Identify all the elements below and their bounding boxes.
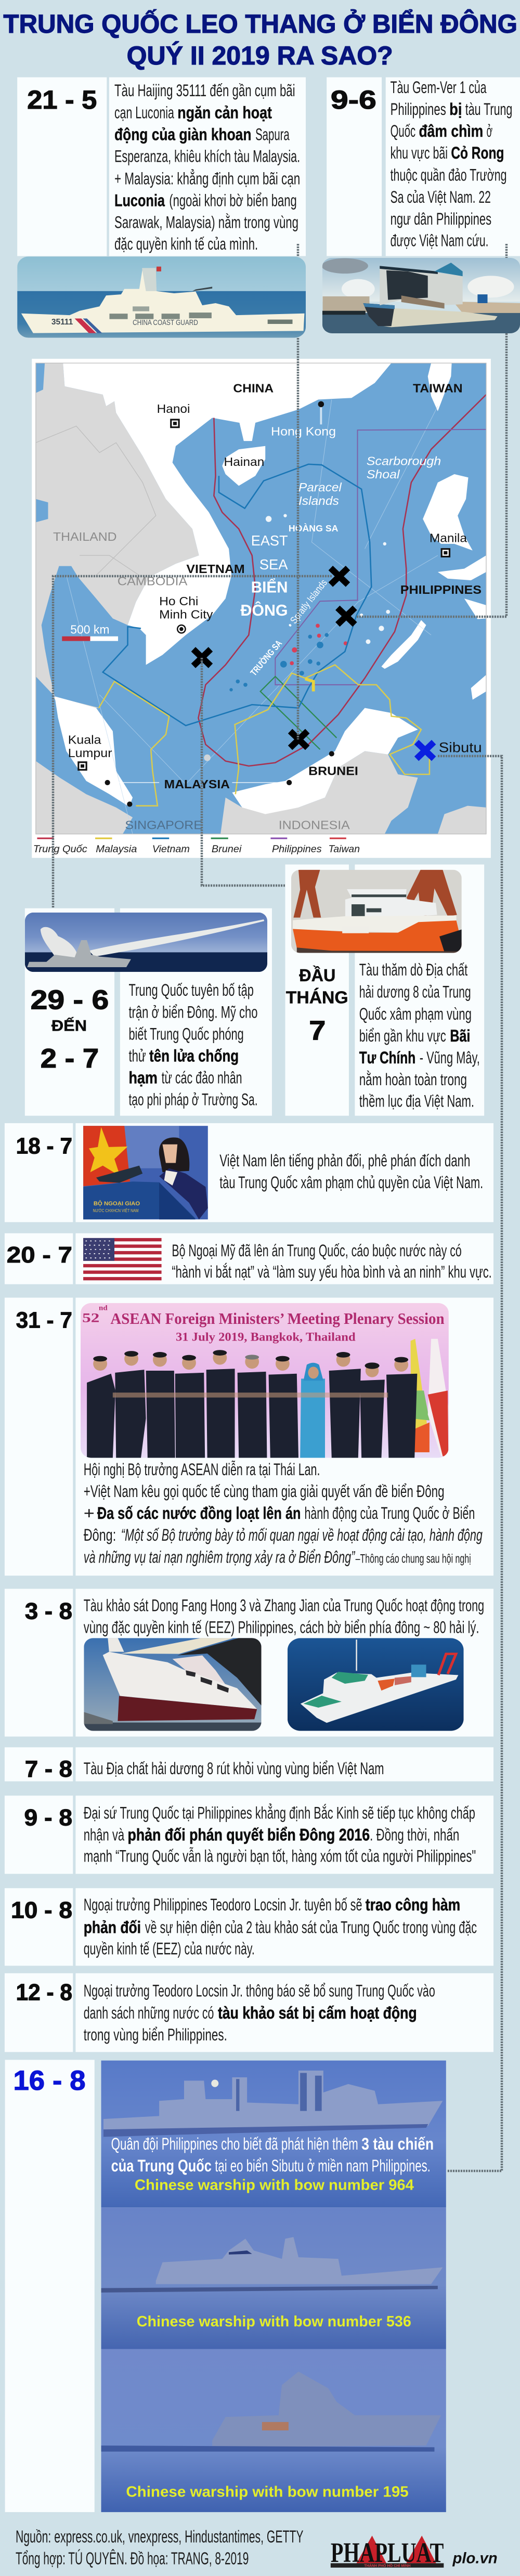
panel: 21-5: Luconia — [114, 191, 165, 210]
panel: 29-6 to 2-7: từ các đảo nhân — [162, 1068, 242, 1087]
panel: 9-6: 9-6 — [331, 85, 376, 114]
logo: Pháp Luật: THÀNH PHỐ HỒ CHÍ MINH — [364, 2562, 411, 2568]
panel: 18-7: 18 - 7 — [16, 1133, 72, 1159]
map labels: INDONESIA — [279, 818, 350, 831]
map labels: VIETNAM — [186, 562, 245, 576]
photo: China Coast Guard ship — [17, 256, 306, 337]
connectors: dotted leader lines from events to map — [53, 244, 506, 2171]
panel: early July: Bãi — [450, 1026, 470, 1045]
panel: 9-8: 9 - 8 — [24, 1805, 72, 1830]
panel: 12-8: danh sách những nước có — [84, 2004, 214, 2023]
panel: 9-6 — [327, 77, 520, 256]
footer credits — [16, 2527, 304, 2568]
photo: warship 964: Chinese warship with bow number 964 — [135, 2177, 414, 2194]
map labels: Hong Kong — [271, 424, 336, 438]
map labels: Manila — [430, 531, 467, 545]
panel: 29-6 to 2-7: tạo phi pháp ở Trường Sa. — [128, 1090, 258, 1109]
panel: 31-7: + — [84, 1504, 95, 1523]
panel: 7-8: 7 - 8 — [25, 1756, 72, 1782]
panel: early July: Tư Chính — [359, 1048, 415, 1067]
panel: 29-6 to 2-7: biết Trung Quốc phóng — [128, 1024, 244, 1043]
claim line: Philippines — [275, 430, 486, 685]
photo: warship 964 — [101, 2061, 446, 2207]
logo: Pháp Luật: PHAPLUAT — [331, 2537, 444, 2568]
panel: 21-5: cạn Luconia — [114, 103, 174, 122]
panel: 29-6 to 2-7 — [25, 908, 272, 1116]
panel: early July — [285, 865, 484, 1116]
city markers — [77, 401, 450, 807]
photo: China Coast Guard ship: CHINA COAST GUARD — [133, 318, 198, 327]
map labels: SINGAPORE — [125, 818, 202, 831]
land: Hainan — [222, 446, 265, 486]
photo: Haiyang Dizhi 8 survey ship — [291, 870, 462, 953]
photo: foreign ministry spokesperson — [83, 1126, 208, 1219]
panel: 9-6: khu vực bãi — [391, 144, 448, 162]
map labels: MALAYSIA — [164, 777, 230, 791]
panel: 21-5: động của giàn khoan — [114, 125, 251, 144]
panel: 3-8 — [5, 1589, 493, 1737]
panel: 21-5: Sapura — [255, 125, 290, 144]
map legend — [33, 838, 360, 855]
map labels: Shoal — [367, 467, 400, 481]
photo: China Coast Guard ship: 35111 — [51, 317, 73, 327]
panel: 21-5 — [17, 77, 306, 256]
panel: early July: ĐẦU — [299, 966, 335, 985]
title — [3, 9, 517, 70]
photo: warship 964: tại eo biển Sibutu ở miền nam Philippines. — [215, 2156, 431, 2175]
map labels: BIỂN — [251, 578, 288, 596]
section: top events and title: + Malaysia: khẳng định cụm bãi cạn — [114, 170, 300, 188]
map labels: Ho Chi — [159, 594, 198, 608]
panel: 31-7: 31 - 7 — [16, 1307, 72, 1333]
panel: 9-8: phản đối phán quyết biển Đông 2016 — [128, 1826, 370, 1844]
panel: 18-7 — [5, 1123, 493, 1222]
frame edge — [36, 363, 486, 834]
panel: early July: THÁNG — [286, 987, 348, 1007]
photo: warship 964: của Trung Quốc — [111, 2156, 212, 2175]
scale bar — [62, 623, 118, 641]
photo: ASEAN foreign ministers meeting: 52 — [82, 1310, 99, 1325]
panel: 3-8: 3 - 8 — [25, 1598, 72, 1624]
footer credits: Tổng hợp: TÚ QUYÊN. Đồ họa: TRANG, 8-2019 — [16, 2548, 249, 2568]
panel: 29-6 to 2-7: thử — [128, 1046, 146, 1065]
land: Philippines — [381, 474, 486, 700]
map labels: ĐÔNG — [240, 601, 288, 619]
panel: 9-8 — [5, 1796, 493, 1874]
panel: 10-8: 10 - 8 — [11, 1897, 72, 1923]
map labels: BRUNEI — [308, 764, 358, 777]
map labels: Scarborough — [367, 454, 441, 468]
panel: 16-8 — [5, 2060, 446, 2512]
map labels: THAILAND — [53, 530, 116, 543]
panel: 21-5: đặc quyền kinh tế của mình. — [114, 235, 258, 253]
section: top events and title: Esperanza, khiêu khích tàu Malaysia. — [114, 147, 300, 165]
panel: 9-6: Philippines — [391, 100, 446, 119]
panel: 31-7 — [5, 1298, 493, 1576]
incident markers — [193, 568, 434, 759]
scale bar: 500 km — [70, 623, 109, 636]
photo: missile launch — [25, 913, 267, 972]
photo: foreign ministry spokesperson: BỘ NGOẠI GIAO — [94, 1200, 140, 1207]
land: Taiwan — [428, 363, 452, 411]
map labels: Kuala — [68, 733, 101, 746]
section: top events and title: Sarawak, Malaysia) nằm trong vùng — [114, 213, 298, 232]
panel: 9-8: nhận và — [84, 1826, 124, 1844]
map legend: Malaysia — [96, 844, 137, 855]
map labels: PHILIPPINES — [400, 583, 482, 596]
photo: warship 964: 3 tàu chiến — [361, 2135, 434, 2153]
logo: Pháp Luật: plo.vn — [452, 2549, 498, 2567]
map labels: EAST — [251, 532, 288, 549]
land: China and Vietnam — [63, 363, 392, 665]
panel: 31-7: Đa số các nước đồng loạt lên án — [97, 1504, 301, 1523]
panel: 29-6 to 2-7: 29 - 6 — [31, 985, 109, 1015]
map legend: Brunei — [212, 844, 242, 855]
map labels: Islands — [298, 494, 339, 508]
photo: warship 964: Quân đội Philippines cho biết đã phát hiện thêm — [111, 2135, 358, 2153]
footer credits: Nguồn: express.co.uk, vnexpress, Hindustantimes, GETTY — [16, 2527, 304, 2546]
panel: 9-6: bị — [449, 100, 462, 119]
section: August events — [5, 1589, 493, 2052]
panel: 9-8: . Đồng thời, nhấn — [370, 1826, 459, 1844]
panel: 12-8: 12 - 8 — [16, 1980, 72, 2005]
map labels: Paracel — [298, 480, 342, 494]
section: 16-8 and footer — [5, 2060, 498, 2568]
section: top events and title: Tàu Haijing 35111 đến gần cụm bãi — [114, 81, 295, 100]
map labels: SEA — [259, 556, 288, 573]
panel: 20-7 — [5, 1233, 493, 1284]
map labels: TRƯỜNG SA — [248, 638, 284, 678]
land: Malaysia and Singapore — [55, 696, 418, 814]
photo: warship 195: Chinese warship with bow number 195 — [126, 2483, 409, 2500]
shipping lanes — [67, 399, 438, 834]
map legend: Vietnam — [152, 844, 190, 855]
panel: 21-5: 21 - 5 — [27, 85, 97, 114]
map labels — [53, 381, 482, 831]
photo: warship 536 — [101, 2207, 446, 2349]
map labels: • Spratly Islands — [285, 578, 330, 630]
panel: 7-8 — [5, 1747, 493, 1782]
photo: Dong Fang Hong 3 — [84, 1638, 262, 1731]
panel: 20-7: 20 - 7 — [7, 1242, 72, 1268]
panel: 12-8: trong vùng biển Philippines. — [84, 2026, 227, 2044]
map labels: HOÀNG SA — [289, 523, 339, 534]
panel: 12-8 — [5, 1973, 493, 2052]
section: mid events — [5, 865, 493, 1284]
panel: 29-6 to 2-7: ĐẾN — [51, 1017, 87, 1035]
panel: 10-8: phản đối — [84, 1918, 141, 1937]
map labels: CHINA — [233, 381, 274, 395]
land: Indonesia — [36, 696, 486, 834]
map labels: Minh City — [159, 607, 213, 621]
title: QUÝ II 2019 RA SAO? — [127, 41, 393, 70]
panel: 31-7: Đông: — [84, 1526, 116, 1544]
photo: sunken Philippine boat — [322, 258, 520, 333]
claim line: Malaysia — [99, 665, 430, 806]
map labels: Sibutu — [439, 739, 482, 755]
map labels: Hainan — [224, 455, 264, 469]
panel: 10-8: trao công hàm — [366, 1896, 460, 1915]
map labels: TAIWAN — [413, 381, 463, 395]
panel: 9-6: Quốc — [391, 122, 415, 140]
section: top events and title — [3, 9, 520, 337]
panel: 29-6 to 2-7: Trung Quốc tuyên bố tập — [128, 981, 254, 999]
icon: US flag — [83, 1238, 162, 1280]
map: South China Sea — [32, 359, 491, 858]
panel: 9-6: ở — [487, 122, 492, 140]
claim line: China — [198, 395, 486, 766]
map legend: Trung Quốc — [33, 844, 87, 855]
photo: warship 195 — [101, 2349, 446, 2512]
claim line: Vietnam — [103, 464, 371, 725]
panel: 10-8 — [5, 1888, 493, 1966]
panel: 21-5: ngăn cản hoạt — [177, 103, 272, 122]
photo: warship 536: Chinese warship with bow number 536 — [137, 2313, 411, 2330]
panel: early July: 7 — [309, 1016, 326, 1046]
panel: early July: biển gần khu vực — [359, 1026, 446, 1045]
map legend: Taiwan — [328, 844, 360, 855]
panel: 29-6 to 2-7: tên lửa chống — [149, 1046, 239, 1065]
panel: 29-6 to 2-7: trận ở biển Đông. Mỹ cho — [128, 1003, 258, 1022]
small islands — [204, 514, 390, 761]
map labels: CAMBODIA — [118, 575, 188, 588]
photo: ASEAN foreign ministers meeting: nd — [99, 1304, 108, 1312]
claim line: Brunei — [261, 676, 336, 749]
panel: 29-6 to 2-7: 2 - 7 — [41, 1044, 99, 1073]
panel: 16-8: 16 - 8 — [14, 2065, 86, 2096]
section: top events and title: (ngoài khơi bờ biển bang — [169, 191, 297, 210]
photo: Zhang Jian — [288, 1638, 464, 1731]
panel: 10-8: quyền kinh tế (EEZ) của nước này. — [84, 1940, 255, 1958]
photo: foreign ministry spokesperson: NƯỚC CHXHCN VIỆT NAM — [93, 1208, 139, 1213]
panel: 29-6 to 2-7: hạm — [128, 1068, 158, 1087]
photo: ASEAN foreign ministers meeting: 31 July 2019, Bangkok, Thailand — [176, 1330, 356, 1344]
photo: ASEAN foreign ministers meeting — [81, 1303, 449, 1458]
map legend: Philippines — [272, 844, 322, 855]
land: internal borders — [36, 426, 156, 575]
land: mainland Southeast Asia — [36, 363, 199, 696]
map labels: Lumpur — [68, 746, 112, 760]
map labels: Hanoi — [157, 402, 190, 415]
panel: 12-8: tàu khảo sát bị cấm hoạt động — [218, 2004, 417, 2023]
